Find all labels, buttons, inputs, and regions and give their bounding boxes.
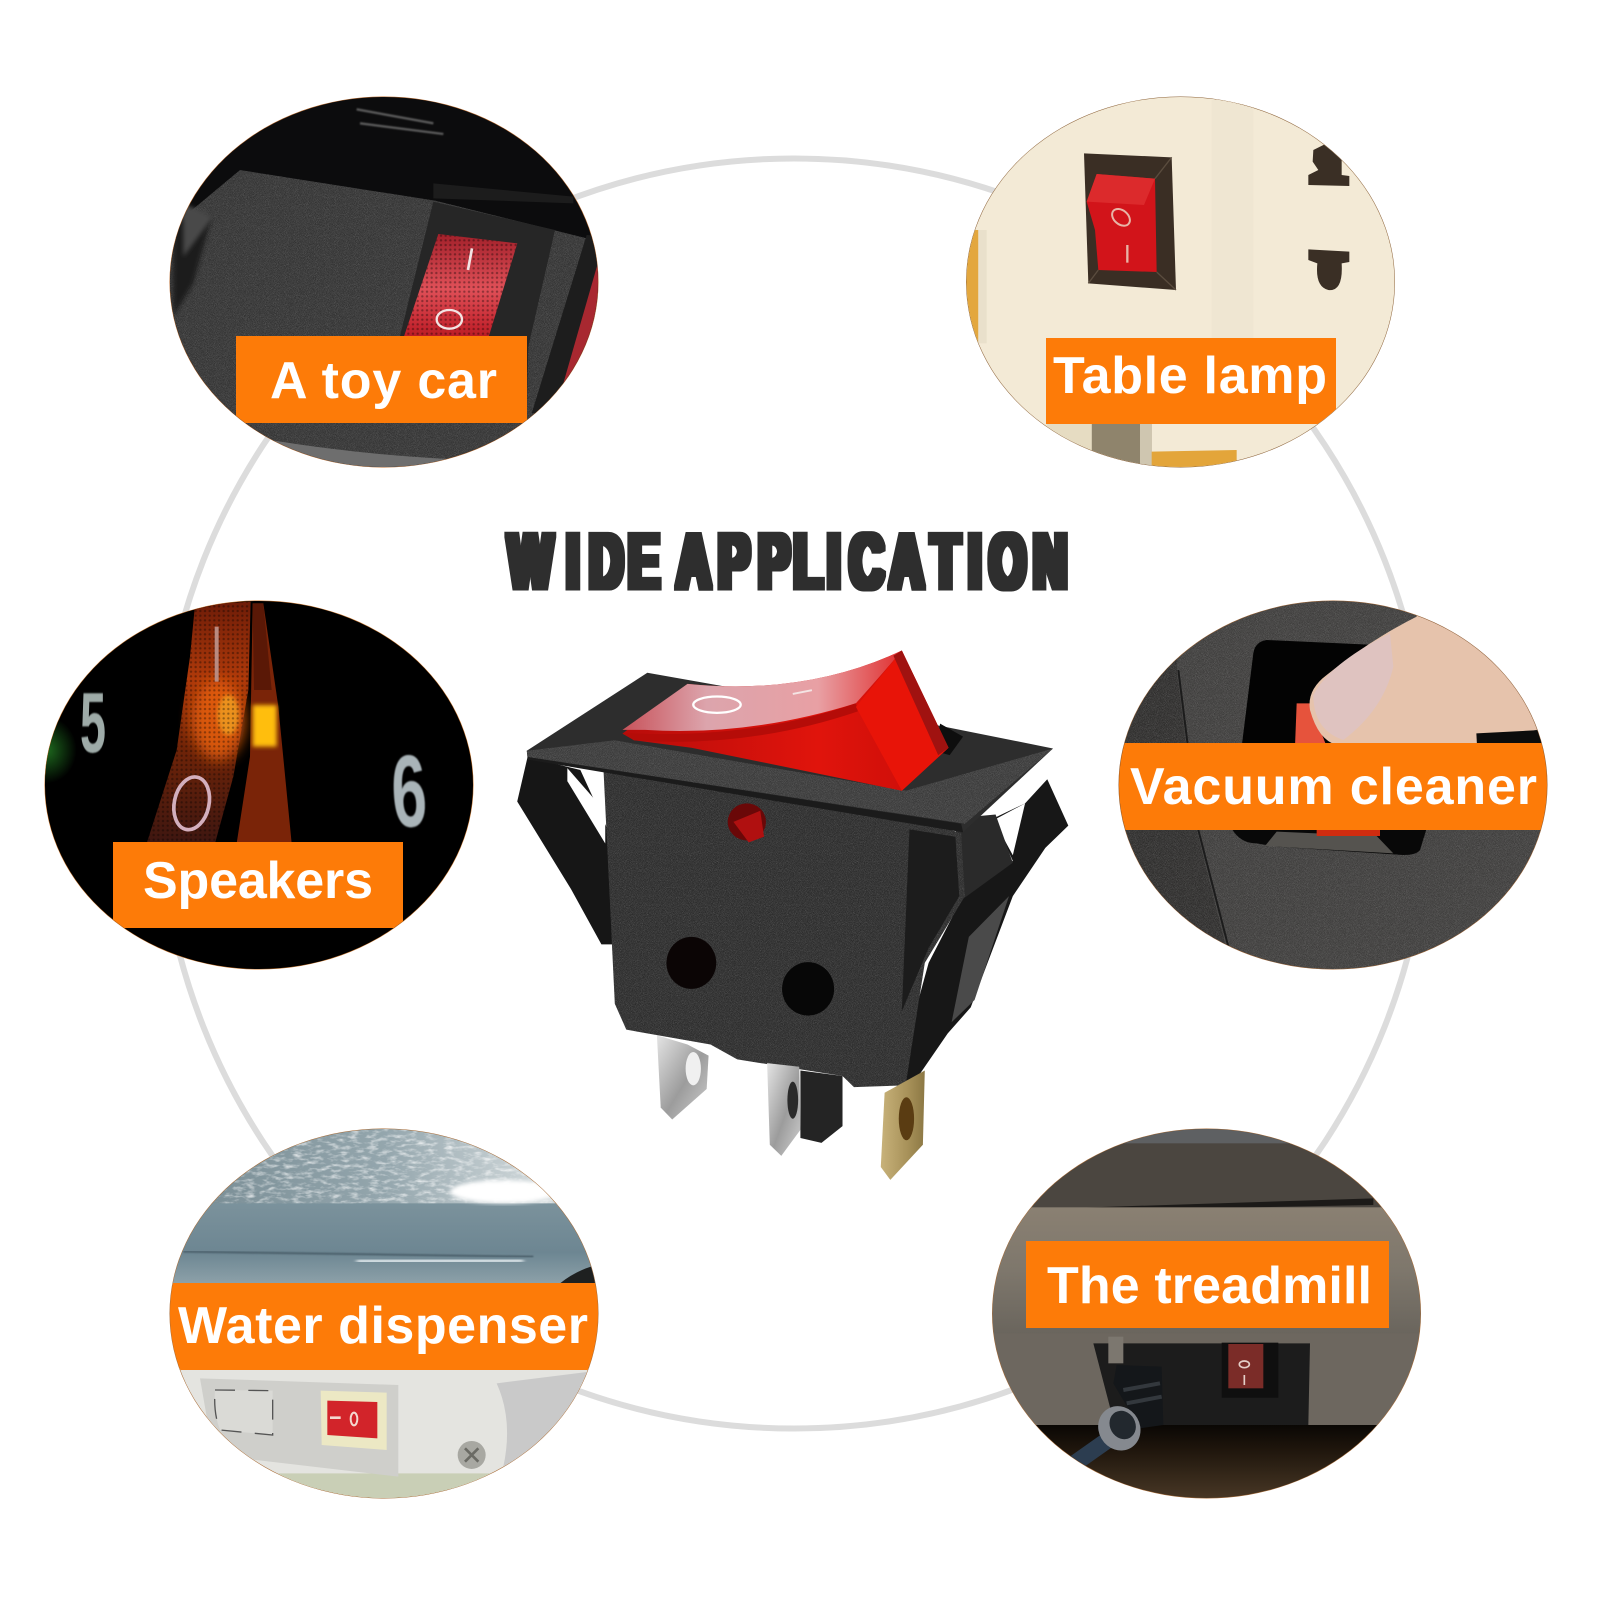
switch housing	[180, 1368, 588, 1498]
label: a toy car	[236, 336, 527, 423]
bottom edge	[274, 440, 447, 467]
terminal: silver 1	[657, 1035, 709, 1119]
red rocker	[1295, 703, 1326, 743]
switch bracket	[1093, 1343, 1310, 1425]
power plug and cable	[1070, 1337, 1163, 1467]
left spring clip	[517, 757, 615, 944]
panel: vacuum cleaner	[1118, 600, 1548, 970]
panel: a toy car	[170, 96, 598, 468]
label: speakers	[113, 842, 403, 928]
panel: water dispenser	[170, 1128, 598, 1498]
title: WIDE APPLICATION	[508, 518, 1067, 605]
label: table lamp: Table lamp	[1053, 347, 1327, 405]
rocker switch	[1084, 153, 1176, 290]
plastic peg	[800, 1070, 843, 1143]
second switch	[532, 235, 598, 414]
flange top	[527, 673, 1053, 832]
dashboard panel	[170, 170, 598, 467]
label: table lamp	[1046, 338, 1336, 424]
lower objects	[1092, 424, 1152, 466]
label: the treadmill	[1026, 1241, 1389, 1328]
switch recess	[1242, 640, 1377, 747]
panel: speakers	[44, 600, 474, 970]
label: water dispenser: Water dispenser	[178, 1297, 588, 1355]
label: vacuum cleaner	[1110, 743, 1560, 830]
red rocker	[622, 651, 949, 791]
finger	[1310, 616, 1537, 743]
switch bezel	[400, 202, 555, 398]
panel: the treadmill	[992, 1128, 1421, 1498]
label: the treadmill: The treadmill	[1047, 1257, 1372, 1315]
red switch	[321, 1391, 387, 1450]
panel: table lamp	[966, 96, 1395, 468]
terminal: silver 2	[767, 1063, 800, 1156]
label: a toy car: A toy car	[270, 352, 497, 410]
dial number 6: 6	[388, 733, 429, 849]
red rocker	[402, 234, 517, 343]
switch body	[603, 766, 965, 1087]
glowing rocker	[147, 602, 292, 843]
label: vacuum cleaner: Vacuum cleaner	[1130, 758, 1537, 816]
screw	[458, 1441, 486, 1469]
central rocker switch product photo	[517, 651, 1068, 1180]
socket holes	[1308, 143, 1349, 186]
label: water dispenser	[160, 1283, 610, 1370]
right spring clip	[898, 779, 1068, 1089]
dial number 5: 5	[80, 675, 106, 771]
connecting ring	[159, 158, 1429, 1428]
terminal: brass	[881, 1070, 925, 1180]
mounting holes	[666, 937, 716, 989]
label: speakers: Speakers	[143, 852, 373, 910]
indicator dot	[728, 803, 766, 840]
